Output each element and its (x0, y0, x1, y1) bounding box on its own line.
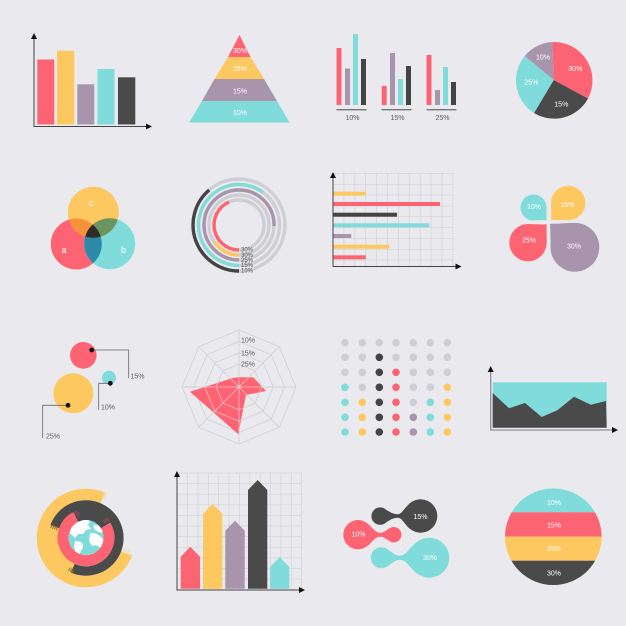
radar chart: 25% (241, 362, 255, 368)
horizontal bar chart with grid (330, 172, 462, 270)
radar chart: 10% (241, 338, 255, 344)
grouped bar chart: 15% (390, 115, 405, 122)
petal chart: 30% (567, 244, 581, 250)
radial progress chart: 30% (241, 248, 254, 254)
bubble chart with callouts: 10% (101, 404, 115, 412)
radar chart (182, 330, 296, 444)
dumbbell blob chart (343, 499, 449, 578)
pie chart (516, 42, 592, 119)
icon: globe (68, 520, 105, 555)
bubble chart with callouts: 15% (130, 374, 145, 380)
radial progress chart: 25% (241, 258, 254, 264)
grouped bar chart: 10% (345, 115, 360, 122)
pyramid chart (189, 35, 290, 122)
venn diagram: b (121, 245, 126, 255)
pyramid chart: 10% (233, 110, 247, 117)
venn diagram (51, 187, 135, 270)
dark fill above the globe (76, 515, 106, 526)
striped circle chart: 15% (547, 522, 561, 530)
radial progress chart: 15% (241, 263, 254, 269)
petal chart (509, 186, 599, 272)
arrow column chart with grid (174, 471, 305, 593)
pyramid chart: 30% (233, 48, 247, 55)
petal chart: 10% (527, 204, 541, 211)
dumbbell blob chart: 15% (413, 514, 428, 521)
inner red ring (63, 517, 109, 561)
hatched ring ends (51, 493, 130, 572)
pie chart: 30% (568, 66, 582, 73)
middle dark ring (55, 505, 119, 571)
pie chart: 15% (554, 102, 568, 108)
petal chart: 25% (522, 238, 536, 244)
bubble chart with callouts: 25% (46, 434, 60, 440)
pie chart: 25% (524, 80, 538, 86)
donut rings with globe (43, 493, 130, 581)
pie chart: 10% (536, 54, 550, 62)
radar chart: 15% (241, 350, 255, 358)
outer yellow ring (43, 494, 127, 581)
dumbbell blob chart: 10% (351, 532, 366, 538)
grouped bar chart (336, 34, 456, 122)
area chart (488, 366, 618, 433)
radial progress chart: 30% (241, 253, 254, 259)
venn diagram: c (89, 198, 94, 208)
pyramid chart: 25% (233, 66, 247, 73)
radial progress chart (193, 179, 285, 274)
grouped bar chart: 25% (435, 115, 450, 122)
dumbbell blob chart: 30% (423, 555, 437, 562)
radial progress chart: 10% (241, 268, 254, 274)
yellow fill beside the dark ring gap (53, 527, 73, 568)
striped circle chart: 10% (547, 500, 561, 507)
striped circle chart: 30% (547, 570, 561, 578)
bar chart: vertical bars with axes (31, 33, 152, 130)
bubble chart with callouts (43, 342, 145, 440)
dot matrix chart (341, 339, 451, 436)
striped circle chart: 25% (547, 546, 561, 553)
pyramid chart: 15% (233, 88, 247, 96)
striped circle chart (505, 488, 602, 585)
venn diagram: a (61, 245, 67, 255)
petal chart: 15% (560, 202, 574, 209)
